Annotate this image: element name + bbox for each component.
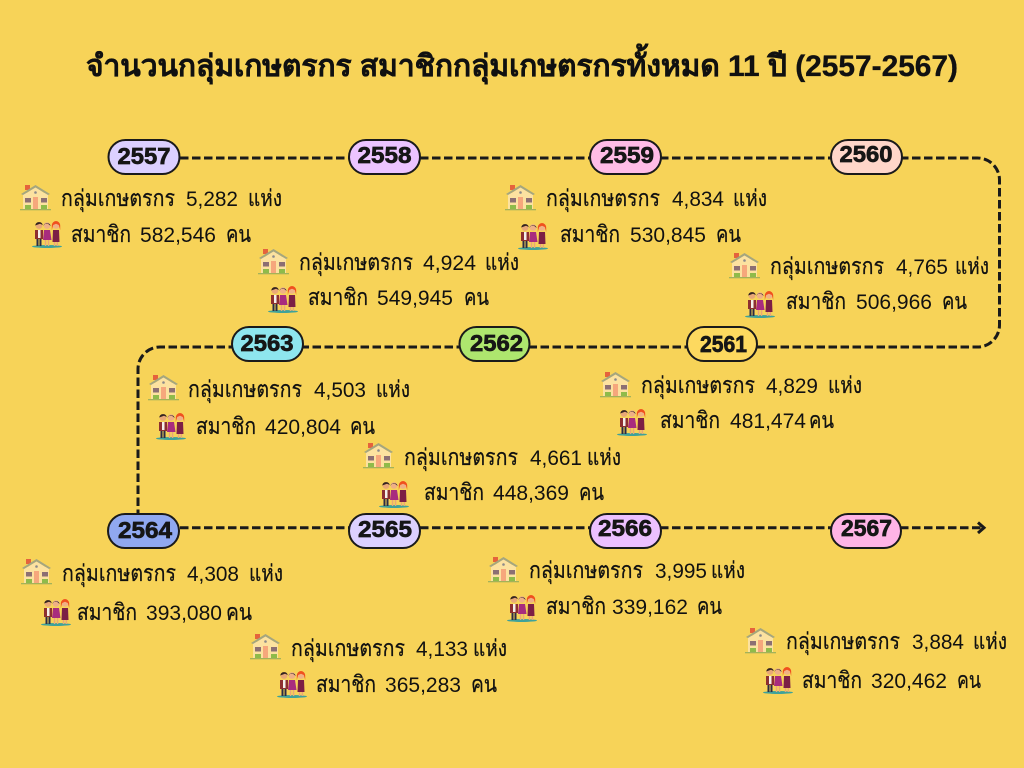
data block 2558: กลุ่มเกษตรกร — [299, 249, 413, 276]
year badge 2563 — [232, 327, 303, 361]
data block 2564: แห่ง — [249, 560, 283, 586]
title: จำนวนกลุ่มเกษตรกร สมาชิกกลุ่มเกษตรกรทั้งหมด 11 ปี (2557-2567) — [86, 43, 958, 85]
year badge 2563: 2563 — [240, 330, 294, 356]
data block 2567: กลุ่มเกษตรกร — [786, 628, 900, 655]
data block 2567: 320,462 — [871, 670, 947, 693]
data block 2558: 4,924 — [423, 252, 476, 275]
data block 2566: แห่ง — [711, 557, 745, 583]
data block 2564: กลุ่มเกษตรกร — [62, 560, 176, 587]
data block 2565: แห่ง — [473, 635, 507, 661]
year badge 2560 — [831, 140, 902, 174]
data block 2562: กลุ่มเกษตรกร — [404, 444, 518, 471]
year badge 2562 — [460, 327, 530, 361]
year badge 2566 — [590, 514, 661, 548]
data block 2565: สมาชิก — [316, 671, 376, 697]
data block 2561: 4,829 — [766, 375, 818, 398]
data block 2559: สมาชิก — [560, 221, 620, 247]
data block 2562: คน — [579, 479, 604, 505]
data block 2558 — [258, 249, 519, 313]
data block 2560: สมาชิก — [786, 288, 846, 314]
data block 2567: สมาชิก — [802, 667, 862, 693]
data block 2560: 4,765 — [896, 256, 948, 279]
data block 2561: คน — [809, 407, 834, 433]
data block 2564: 4,308 — [187, 563, 239, 586]
data block 2559: กลุ่มเกษตรกร — [546, 185, 660, 212]
data block 2557 — [20, 185, 282, 248]
data block 2558: แห่ง — [485, 249, 519, 275]
data block 2565: กลุ่มเกษตรกร — [291, 635, 405, 662]
data block 2559: 4,834 — [672, 188, 724, 211]
year badge 2566: 2566 — [598, 515, 652, 541]
data block 2567 — [745, 628, 1007, 694]
data block 2564: 393,080 — [146, 602, 222, 625]
data block 2565 — [250, 634, 507, 698]
data block 2567: คน — [957, 667, 981, 693]
data block 2565: คน — [471, 671, 497, 697]
year badge 2560: 2560 — [840, 141, 892, 167]
data block 2558: 549,945 — [377, 287, 453, 310]
data block 2563: 4,503 — [314, 379, 366, 402]
data block 2559 — [505, 185, 767, 250]
data block 2567: 3,884 — [912, 631, 964, 654]
data block 2561: กลุ่มเกษตรกร — [641, 372, 755, 399]
data block 2565: 4,133 — [416, 638, 468, 661]
data block 2559: คน — [716, 221, 741, 247]
year badge 2559 — [590, 140, 661, 174]
data block 2563: คน — [350, 413, 375, 439]
data block 2557: แห่ง — [248, 185, 282, 211]
data block 2557: สมาชิก — [71, 221, 131, 247]
year badge 2558 — [349, 140, 420, 174]
data block 2562: 448,369 — [493, 482, 569, 505]
year badge 2564 — [108, 514, 179, 548]
year badge 2558: 2558 — [358, 142, 412, 168]
data block 2557: กลุ่มเกษตรกร — [61, 185, 175, 212]
data block 2563: แห่ง — [376, 376, 410, 402]
data block 2560: กลุ่มเกษตรกร — [770, 253, 884, 280]
data block 2562 — [363, 443, 621, 508]
year badge 2561: 2561 — [700, 331, 747, 357]
timeline path: dashed serpentine connector — [138, 158, 1000, 514]
data block 2564: สมาชิก — [77, 599, 137, 625]
data block 2557: 5,282 — [186, 188, 238, 211]
year badge 2557 — [108, 140, 180, 174]
year badge 2559: 2559 — [600, 142, 654, 168]
data block 2563: สมาชิก — [196, 413, 256, 439]
data block 2557: คน — [226, 221, 251, 247]
data block 2564 — [21, 559, 283, 626]
data block 2560: คน — [942, 288, 967, 314]
data block 2559: แห่ง — [733, 185, 767, 211]
data block 2563: กลุ่มเกษตรกร — [188, 376, 302, 403]
data block 2557: 582,546 — [140, 224, 216, 247]
data block 2561: 481,474 — [730, 410, 806, 433]
data block 2560 — [729, 253, 989, 318]
data block 2566: กลุ่มเกษตรกร — [529, 557, 643, 584]
data block 2561 — [600, 372, 862, 436]
timeline arrow: final row with arrowhead — [180, 522, 984, 533]
data block 2566: สมาชิก — [546, 593, 606, 619]
year badge 2567: 2567 — [841, 515, 892, 541]
data block 2567: แห่ง — [973, 628, 1007, 654]
data block 2562: 4,661 — [530, 447, 582, 470]
data block 2566: 339,162 — [612, 596, 688, 619]
data block 2566 — [488, 557, 745, 622]
year badge 2565: 2565 — [358, 516, 412, 542]
year badge 2564: 2564 — [118, 517, 172, 543]
data block 2563 — [148, 375, 410, 440]
year badge 2567 — [831, 514, 901, 548]
data block 2561: แห่ง — [828, 372, 862, 398]
data block 2559: 530,845 — [630, 224, 706, 247]
data block 2565: 365,283 — [385, 674, 461, 697]
data block 2560: แห่ง — [955, 253, 989, 279]
data block 2566: 3,995 — [655, 560, 707, 583]
year badge 2562: 2562 — [470, 330, 523, 356]
year badge 2565 — [349, 514, 420, 548]
data block 2562: สมาชิก — [424, 479, 484, 505]
data block 2562: แห่ง — [587, 444, 621, 470]
year badge 2557: 2557 — [118, 143, 170, 169]
data block 2560: 506,966 — [856, 291, 932, 314]
data block 2566: คน — [697, 593, 722, 619]
year badge 2561 — [687, 327, 757, 361]
data block 2564: คน — [226, 599, 252, 625]
data block 2558: สมาชิก — [308, 284, 368, 310]
data block 2563: 420,804 — [265, 416, 341, 439]
data block 2558: คน — [464, 284, 489, 310]
data block 2561: สมาชิก — [660, 407, 720, 433]
